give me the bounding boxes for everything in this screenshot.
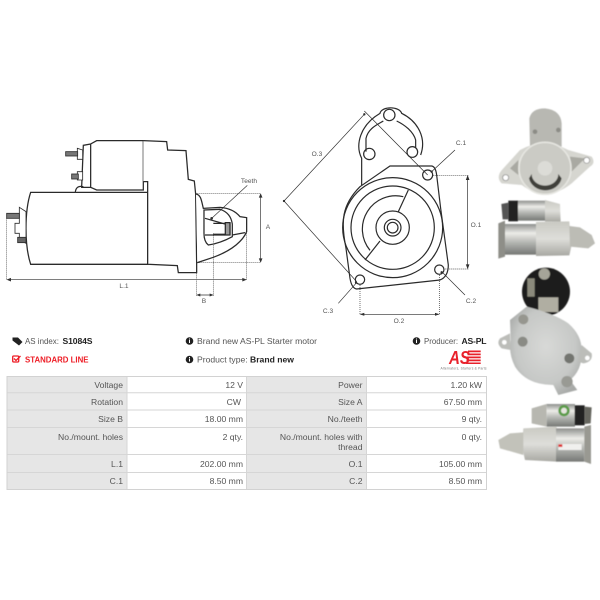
solenoid: [75, 141, 143, 192]
front view labels: C.3: [323, 308, 333, 315]
front view labels: O.1: [471, 222, 482, 229]
row: rotation and size A: [91, 397, 482, 407]
terminal bolts: [7, 148, 83, 243]
front view labels: O.2: [394, 318, 405, 325]
row: size B and teeth: Size B: [98, 414, 123, 424]
row: voltage and power: Power: [338, 380, 363, 390]
icon: tags: [12, 338, 22, 346]
AS logo: [440, 347, 487, 370]
row: mounting holes: [58, 432, 482, 452]
row: C.1 and C.2: C.2: [349, 476, 363, 486]
row: C.1 and C.2: 8.50 mm: [449, 476, 482, 486]
row: L.1 and O.1: 105.00 mm: [439, 459, 482, 469]
bearing housing: [343, 178, 443, 278]
upper mounting lobe: [359, 108, 423, 185]
front view labels: C.2: [466, 298, 476, 305]
front view labels: O.3: [312, 151, 323, 158]
motor body: [26, 192, 148, 264]
row: rotation and size A: 67.50 mm: [444, 397, 482, 407]
standard line row: [13, 354, 294, 364]
row: L.1 and O.1: [111, 459, 482, 469]
row: size B and teeth: No./teeth: [328, 414, 363, 424]
side view labels: A: [266, 224, 271, 231]
icon: info: [413, 337, 420, 345]
row: L.1 and O.1: 202.00 mm: [200, 459, 243, 469]
icon: red check box: [13, 356, 20, 362]
side view labels: [119, 178, 271, 305]
row: voltage and power: Voltage: [94, 380, 123, 390]
row: mounting holes: thread: [338, 442, 363, 452]
dimension lines: [283, 111, 469, 315]
row: size B and teeth: [98, 414, 482, 424]
bolt holes: [423, 170, 433, 180]
front view technical drawing: [283, 108, 469, 315]
side view labels: B: [202, 298, 207, 305]
drive housing: [143, 141, 197, 273]
front view labels: C.1: [456, 140, 466, 147]
row: L.1 and O.1: O.1: [349, 459, 363, 469]
row: size B and teeth: 18.00 mm: [205, 414, 243, 424]
AS index label: AS index:: [25, 336, 59, 346]
specification table: [7, 376, 486, 490]
photo: starter front view: [499, 108, 593, 194]
row: rotation and size A: CW: [227, 397, 242, 407]
table background and grid: [7, 376, 486, 490]
producer value: AS-PL: [462, 336, 486, 346]
row: C.1 and C.2: C.1: [110, 476, 123, 486]
row: mounting holes: 2 qty.: [223, 432, 243, 442]
producer label: Producer:: [424, 336, 458, 346]
row: size B and teeth: 9 qty.: [462, 414, 482, 424]
dimension lines: [7, 185, 262, 296]
product type label: Product type:: [197, 354, 248, 364]
row: mounting holes: No./mount. holes: [58, 432, 123, 442]
side view technical drawing: [7, 141, 262, 296]
row: voltage and power: 1.20 kW: [450, 380, 483, 390]
row: rotation and size A: Size A: [338, 397, 363, 407]
AS logo: Alternators, Starters & Parts: [440, 366, 487, 370]
row: voltage and power: 12 V: [225, 380, 243, 390]
AS index value: S1084S: [62, 336, 93, 346]
row: mounting holes: No./mount. holes with: [280, 432, 363, 442]
index row: [12, 336, 486, 346]
row: rotation and size A: Rotation: [91, 397, 123, 407]
drive nose: [196, 194, 247, 263]
row: voltage and power: [94, 380, 483, 390]
AS logo: AS: [448, 347, 471, 368]
row: L.1 and O.1: L.1: [111, 459, 123, 469]
row: C.1 and C.2: [110, 476, 482, 486]
product type value: Brand new: [250, 354, 294, 364]
product description: Brand new AS-PL Starter motor: [197, 336, 317, 346]
side view labels: L.1: [119, 283, 129, 290]
photo: starter side view, right: [498, 200, 595, 259]
photo: starter rear view: [498, 268, 592, 395]
icon: info: [186, 337, 193, 345]
side view labels: Teeth: [241, 178, 257, 185]
icon: info: [186, 356, 193, 363]
row: mounting holes: 0 qty.: [462, 432, 482, 442]
row: C.1 and C.2: 8.50 mm: [210, 476, 243, 486]
standard line label: STANDARD LINE: [25, 354, 89, 364]
front view labels: [312, 140, 482, 325]
photo: starter side view, left: [498, 404, 592, 464]
mounting flange: [343, 166, 448, 289]
